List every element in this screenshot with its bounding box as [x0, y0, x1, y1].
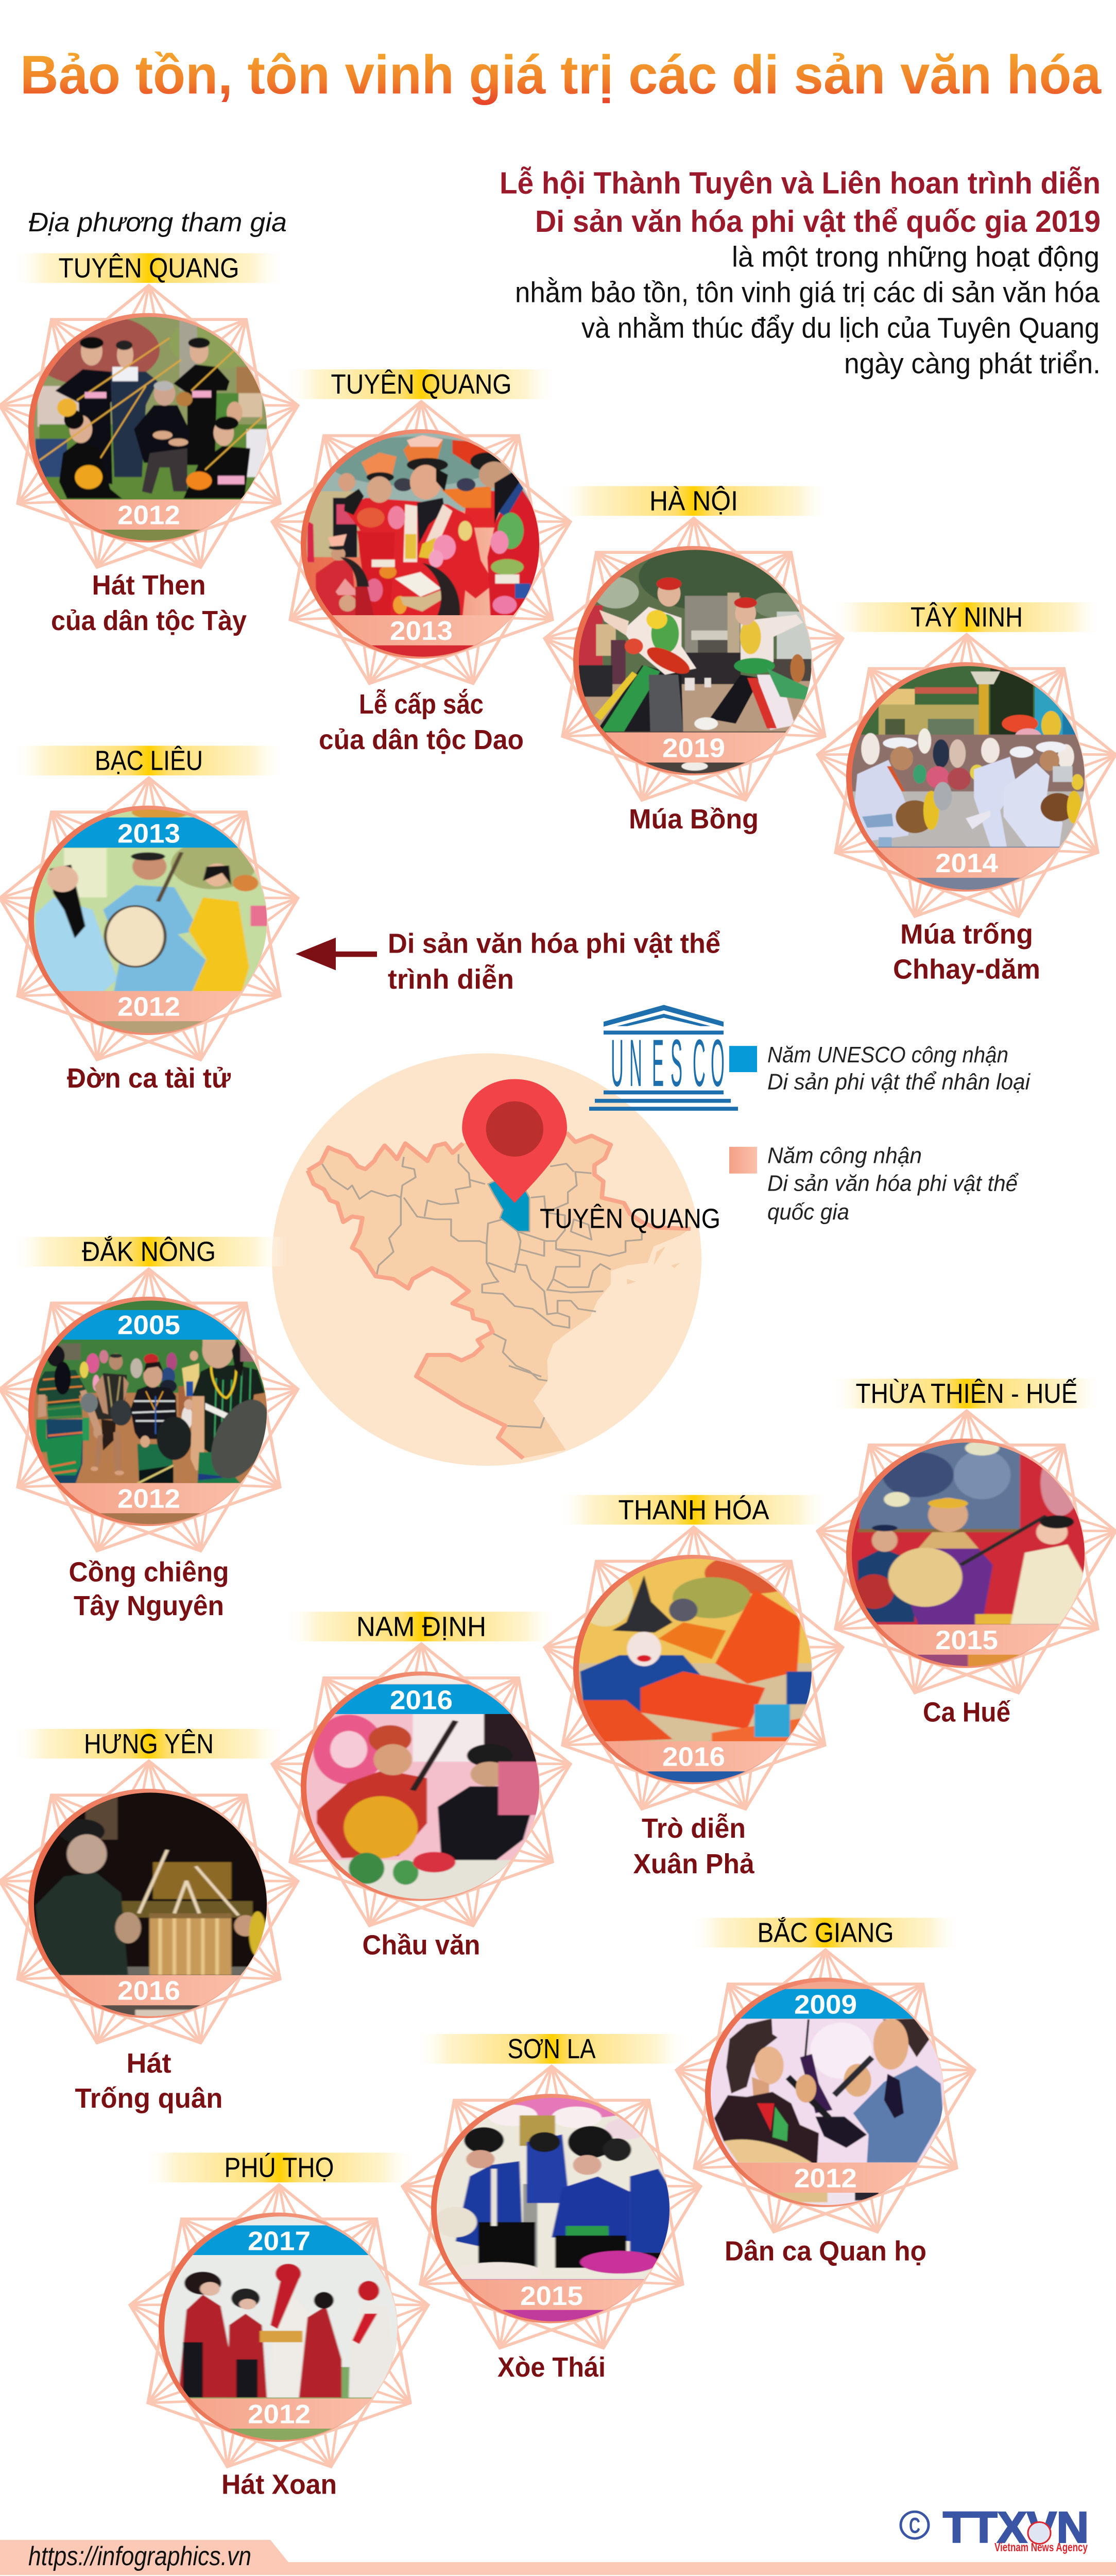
intro text block	[500, 165, 1101, 380]
star ornament	[671, 1950, 980, 2242]
province label	[12, 1728, 286, 1759]
province label: NAM ĐỊNH	[356, 1611, 486, 1642]
province label	[557, 485, 831, 516]
year text: UNESCO: 2009	[794, 1990, 857, 2020]
heading: participating localities: Địa phương tham gia	[28, 208, 287, 238]
caption: Chhay-dăm	[893, 954, 1040, 985]
province label	[830, 601, 1104, 633]
UNESCO logo: S	[671, 1026, 682, 1101]
arrow label: trình diễn	[388, 963, 514, 995]
photo	[149, 2207, 413, 2447]
panel: Múa trống Chhay-dăm, Tây Ninh	[812, 601, 1116, 985]
province label	[284, 1611, 558, 1642]
province label: THANH HÓA	[619, 1494, 769, 1525]
caption: Cồng chiêng	[69, 1556, 229, 1587]
caption: Ca Huế	[923, 1696, 1010, 1727]
province label: PHÚ THỌ	[225, 2151, 334, 2183]
rim	[28, 806, 267, 1035]
year badge: national	[332, 615, 513, 646]
map of northern Vietnam	[308, 1079, 691, 1459]
panel: Ca Huế, Thừa Thiên - Huế	[812, 1378, 1116, 1727]
star ornament	[539, 518, 848, 810]
panel: Múa Bồng, Hà Nội	[539, 485, 848, 835]
rim	[846, 1438, 1085, 1668]
year badge: national	[570, 1741, 817, 1771]
panel: Hát Xoan, Phú Thọ	[125, 2151, 434, 2500]
star ornament	[125, 2185, 434, 2477]
year text: 2012	[794, 2164, 857, 2193]
year text: UNESCO: 2017	[248, 2226, 311, 2256]
legend: national: Năm công nhận	[767, 1143, 922, 1168]
rim	[846, 662, 1085, 892]
province label: SƠN LA	[508, 2033, 596, 2064]
photo	[292, 1664, 555, 1909]
caption: Múa trống	[900, 918, 1033, 950]
panel: Hát Trống quân, Hưng Yên	[0, 1728, 303, 2114]
caption: Hát Xoan	[221, 2469, 337, 2500]
province label	[415, 2033, 689, 2064]
year badge: UNESCO	[25, 1310, 272, 1340]
province label: TUYÊN QUANG	[331, 368, 512, 400]
year badge: national	[843, 848, 1090, 878]
UNESCO logo: C	[693, 1026, 706, 1101]
panel: Cồng chiêng Tây Nguyên, Đắk Nông	[0, 1236, 303, 1621]
year text: 2016	[117, 1976, 180, 2006]
province label	[557, 1494, 831, 1525]
caption: Lễ cấp sắc	[359, 688, 484, 720]
panel: Chầu văn, Nam Định	[267, 1611, 576, 1960]
photo	[306, 433, 539, 657]
star ornament	[0, 778, 303, 1070]
caption: Trò diễn	[642, 1812, 746, 1844]
footer url: https://infographics.vn	[28, 2541, 251, 2571]
footer bar	[0, 2540, 1116, 2575]
year badge: national	[156, 2398, 403, 2429]
photo	[579, 550, 812, 774]
province label	[12, 1236, 286, 1267]
caption	[75, 2047, 222, 2114]
star ornament	[267, 1644, 576, 1936]
year text: 2013	[390, 616, 453, 646]
star ornament	[539, 1527, 848, 1819]
year text: 2015	[935, 1625, 998, 1655]
year badge: national	[843, 1624, 1090, 1655]
star ornament	[397, 2066, 706, 2358]
rim	[28, 1789, 267, 2018]
caption: Trống quân	[75, 2082, 222, 2114]
intro text block: là một trong những hoạt động	[732, 241, 1100, 273]
intro text block: ngày càng phát triển.	[844, 348, 1101, 380]
year badge: national	[60, 500, 241, 530]
province label: BẮC GIANG	[758, 1917, 894, 1948]
UNESCO logo	[589, 1005, 738, 1111]
province label: TUYÊN QUANG	[59, 252, 239, 283]
year badge: national	[25, 1483, 272, 1513]
arrow label: Di sản văn hóa phi vật thể	[388, 928, 720, 959]
agency logo: TTXVN	[943, 2503, 1089, 2552]
photo	[21, 1782, 285, 2028]
caption: của dân tộc Tày	[51, 605, 247, 636]
rim	[301, 1671, 540, 1901]
caption	[319, 688, 524, 755]
rim	[573, 1555, 812, 1784]
caption: Múa Bồng	[629, 803, 759, 835]
year badge: national	[428, 2280, 675, 2310]
year badge: national	[570, 733, 817, 762]
panel: Xòe Thái, Sơn La	[397, 2033, 706, 2383]
map label: TUYÊN QUANG	[540, 1202, 720, 1234]
rim	[705, 1978, 944, 2207]
star ornament	[267, 401, 576, 693]
caption: Xuân Phả	[633, 1848, 754, 1879]
caption	[893, 918, 1040, 985]
caption: Xòe Thái	[497, 2351, 606, 2383]
star ornament	[812, 1411, 1116, 1703]
UNESCO logo: U	[611, 1026, 624, 1101]
year text: 2012	[117, 992, 180, 1022]
arrow label	[388, 928, 720, 995]
year badge: UNESCO	[25, 818, 272, 848]
map background circle	[272, 1054, 701, 1466]
panel: Hát Then, Tuyên Quang	[0, 252, 303, 636]
caption	[51, 569, 247, 636]
photo	[34, 317, 267, 541]
star ornament	[812, 635, 1116, 926]
star ornament	[0, 1269, 303, 1561]
rim	[28, 313, 267, 543]
province label: THỪA THIÊN - HUẾ	[856, 1378, 1077, 1409]
province label: ĐẮK NÔNG	[82, 1236, 216, 1267]
UNESCO logo: O	[711, 1026, 725, 1101]
photo	[843, 656, 1092, 897]
UNESCO logo: E	[652, 1026, 664, 1101]
year text: 2015	[520, 2281, 583, 2311]
year text: 2016	[662, 1742, 725, 1772]
UNESCO logo: N	[629, 1026, 642, 1101]
province label	[689, 1917, 963, 1948]
panel: Dân ca Quan họ, Bắc Giang	[671, 1917, 980, 2266]
province label	[142, 2151, 416, 2183]
year text: 2012	[248, 2399, 311, 2429]
province label	[12, 745, 286, 776]
year text: 2019	[662, 734, 725, 763]
caption: Dân ca Quan họ	[725, 2235, 926, 2266]
caption	[69, 1556, 229, 1621]
rim	[573, 546, 812, 775]
caption: Hát Then	[92, 569, 205, 601]
year text: UNESCO: 2005	[117, 1311, 180, 1341]
caption: Đờn ca tài tử	[67, 1062, 231, 1094]
arrow	[296, 938, 377, 970]
photo	[695, 1968, 953, 2216]
legend: UNESCO	[729, 1043, 1031, 1094]
rim	[431, 2094, 670, 2324]
year badge: UNESCO	[156, 2225, 403, 2255]
year text: UNESCO: 2013	[117, 819, 180, 849]
rim	[28, 1297, 267, 1526]
year badge: UNESCO	[702, 1989, 949, 2019]
panel: Lễ cấp sắc, Tuyên Quang	[267, 368, 576, 755]
legend: national: quốc gia	[767, 1200, 849, 1225]
legend: UNESCO: Năm UNESCO công nhận	[767, 1043, 1008, 1067]
legend: national: Di sản văn hóa phi vật thể	[767, 1171, 1019, 1196]
agency logo: C	[909, 2514, 920, 2538]
rim	[301, 429, 540, 659]
year badge: national	[702, 2163, 949, 2193]
panel: Đờn ca tài tử, Bạc Liêu	[0, 745, 303, 1094]
location pin	[462, 1079, 567, 1203]
photo	[21, 1291, 281, 1536]
star ornament	[0, 285, 303, 577]
photo	[562, 1549, 826, 1792]
caption: Tây Nguyên	[74, 1590, 224, 1621]
highlighted province: Tuyên Quang	[488, 1179, 529, 1231]
panel: Trò diễn Xuân Phả, Thanh Hóa	[539, 1494, 848, 1879]
legend: UNESCO: Di sản phi vật thể nhân loại	[767, 1070, 1031, 1094]
year text: 2012	[117, 500, 180, 530]
province label: BẠC LIÊU	[95, 745, 203, 776]
year text: UNESCO: 2016	[390, 1685, 453, 1715]
caption: Chầu văn	[363, 1929, 480, 1960]
rim	[159, 2212, 398, 2442]
year badge: national	[25, 991, 272, 1021]
year badge: national	[25, 1975, 272, 2005]
year badge: UNESCO	[298, 1684, 545, 1714]
year text: 2014	[935, 849, 999, 878]
photo	[833, 1430, 1103, 1675]
province label: HƯNG YÊN	[84, 1728, 214, 1759]
year text: 2012	[117, 1484, 180, 1514]
star ornament	[0, 1761, 303, 2053]
caption: của dân tộc Dao	[319, 724, 524, 755]
caption	[633, 1812, 754, 1879]
photo	[420, 2089, 683, 2329]
legend: national	[729, 1143, 1019, 1225]
caption: Hát	[127, 2047, 171, 2079]
map panel	[272, 1054, 720, 1466]
province label: TÂY NINH	[911, 601, 1023, 633]
photo	[21, 799, 278, 1041]
province label: HÀ NỘI	[649, 485, 738, 516]
